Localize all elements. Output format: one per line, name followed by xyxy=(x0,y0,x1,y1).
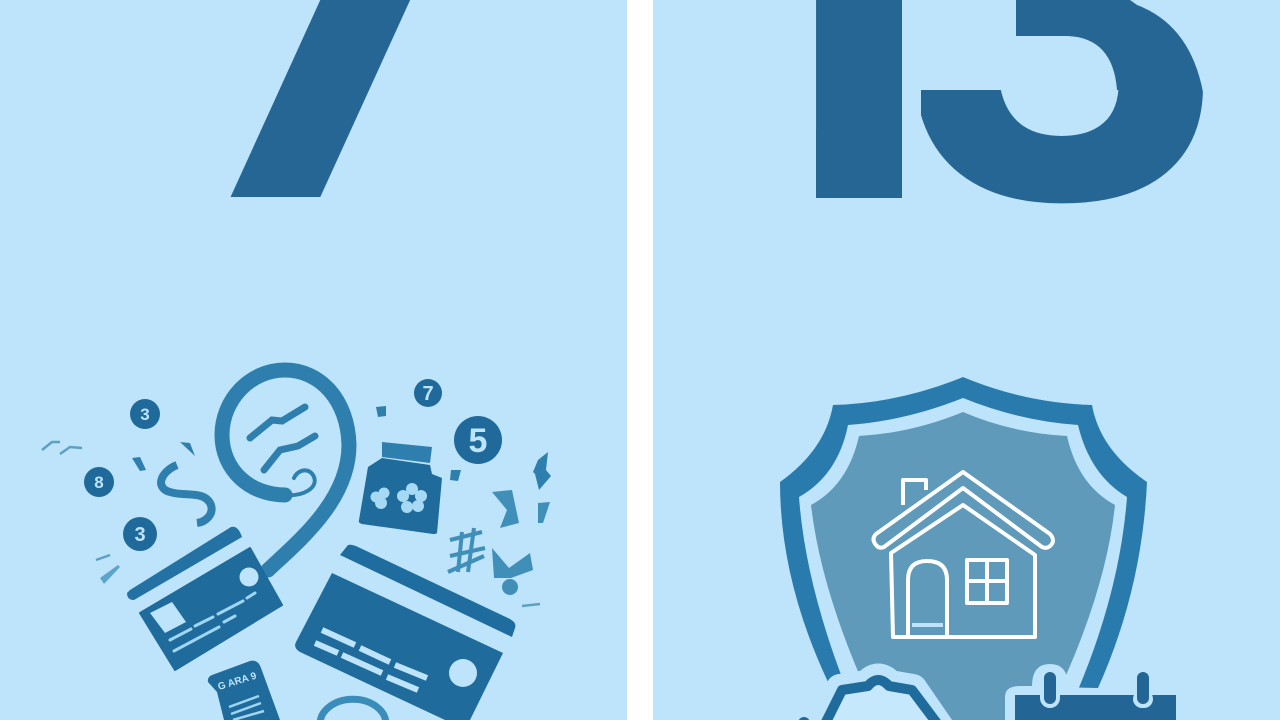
icon: dollar curl xyxy=(161,465,212,523)
icon: coin 5 xyxy=(454,416,502,464)
panel: right protection xyxy=(653,0,1280,720)
icon: coin 8 xyxy=(84,467,114,497)
heading number 13 xyxy=(816,0,1203,204)
icon: taxi xyxy=(798,678,942,720)
icon: coin 3: 3 xyxy=(140,405,150,424)
icon: spiral xyxy=(222,370,349,570)
icon: coin 7: 7 xyxy=(422,383,434,405)
icon: receipt: G ARA 9 xyxy=(217,671,258,693)
icon: calendar xyxy=(1005,664,1176,720)
icon: shield xyxy=(780,377,1147,720)
icon: coin 7 xyxy=(414,379,442,407)
icon: coin 8: 8 xyxy=(94,473,104,492)
icon: small credit card xyxy=(127,527,282,670)
icon: receipt xyxy=(208,661,280,720)
icon: coin 3 lower xyxy=(123,517,157,551)
icon: coin 3 lower: 3 xyxy=(134,524,146,546)
icon: coin 3 xyxy=(130,399,160,429)
icon: house xyxy=(874,472,1053,637)
panel: left debt xyxy=(0,0,627,720)
icon: coin 5: 5 xyxy=(469,422,487,460)
icon: bottom ring xyxy=(320,699,386,720)
icon: large credit card xyxy=(295,545,515,720)
icon: jar xyxy=(359,442,442,534)
icon: scattered fragments xyxy=(42,406,551,606)
